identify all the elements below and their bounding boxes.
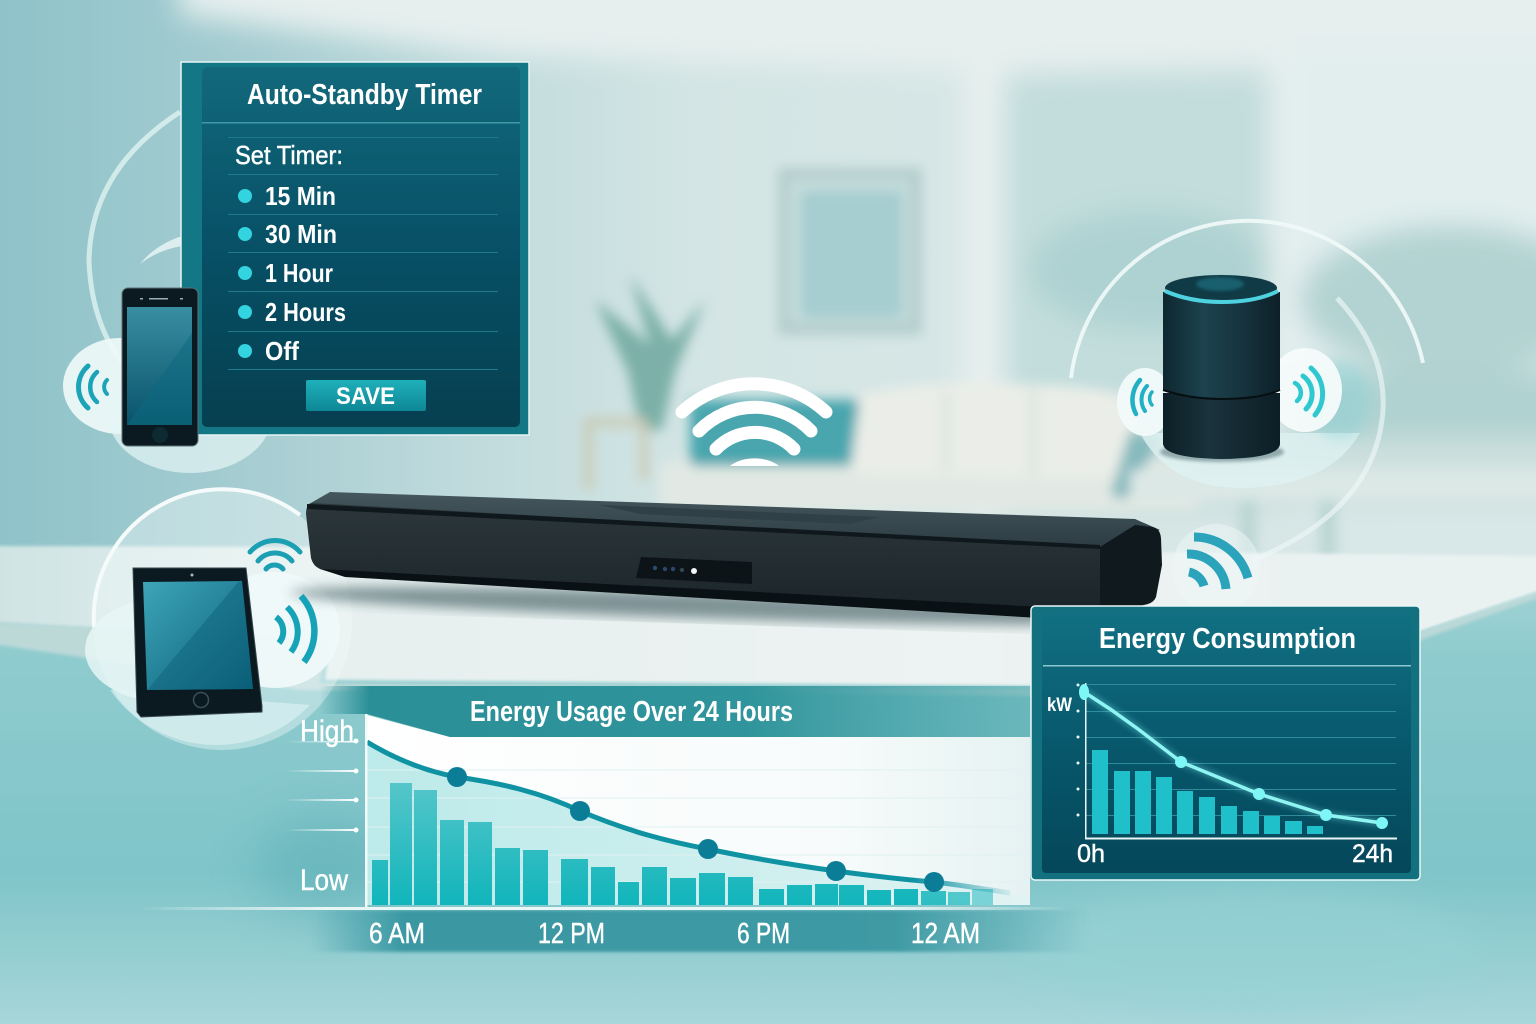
- panel: energy usage over 24 hours chart: [140, 686, 1090, 952]
- axes: [1076, 683, 1397, 840]
- timer option rows: Set Timer:: [235, 140, 343, 170]
- axis lines: [140, 714, 1070, 910]
- icon: speaker signal waves: [1132, 368, 1323, 415]
- save button: SAVE: [336, 383, 395, 410]
- panel: energy consumption: [1031, 606, 1420, 880]
- teal lower backdrop: [0, 590, 1536, 1024]
- timer option rows: 1 Hour: [265, 258, 333, 288]
- chart plot background: [367, 715, 1030, 905]
- soundbar display: [636, 557, 752, 584]
- x-axis labels: 6 AM: [369, 918, 425, 950]
- heading: energy consumption: Energy Consumption: [1099, 623, 1356, 655]
- icon: corner wifi signal: [1172, 524, 1260, 612]
- heading: auto-standby timer: Auto-Standby Timer: [247, 79, 482, 111]
- tablet connection bubble: [85, 489, 352, 750]
- y-axis labels: [300, 715, 354, 897]
- timer option rows: 2 Hours: [265, 297, 346, 327]
- chart title: Energy Usage Over 24 Hours: [470, 696, 793, 728]
- consumption trend line: [1079, 684, 1388, 829]
- smart speaker connection bubble: [1071, 221, 1423, 560]
- save button: [306, 380, 426, 411]
- axis labels: 0h: [1077, 840, 1105, 868]
- timer option rows: [228, 137, 498, 370]
- icon: phone signal waves: [79, 366, 107, 408]
- usage trend line: [367, 742, 1010, 893]
- white counter surface: [0, 546, 1536, 696]
- timer option rows: 30 Min: [265, 219, 337, 249]
- x-axis label strip: [310, 910, 1090, 952]
- chart header band: [320, 686, 1030, 737]
- x-axis labels: 12 PM: [538, 918, 605, 950]
- x-axis labels: 12 AM: [911, 918, 980, 950]
- icon: main white wifi signal: [682, 384, 826, 466]
- axis labels: kW: [1047, 695, 1072, 716]
- consumption bars: [1092, 750, 1323, 834]
- icon: tablet wifi: [250, 541, 300, 569]
- soundbar: [290, 492, 1162, 633]
- icon: tablet: [133, 568, 262, 717]
- icon: tablet signal waves: [276, 596, 314, 662]
- tablet device and signals: [133, 541, 314, 717]
- icon: smartphone: [122, 288, 198, 446]
- phone connection bubble: [63, 112, 272, 473]
- x-axis labels: 6 PM: [737, 918, 790, 950]
- icon: smart speaker: [1160, 275, 1284, 462]
- timer option rows: 15 Min: [265, 181, 336, 211]
- grid lines: [1085, 684, 1396, 816]
- y-axis labels: Low: [300, 864, 348, 897]
- axis labels: [1047, 695, 1393, 868]
- axis labels: 24h: [1352, 840, 1393, 868]
- x-axis labels: [369, 918, 980, 950]
- bars: [372, 783, 993, 905]
- y-axis ticks: [285, 738, 358, 832]
- timer option rows: Off: [265, 336, 299, 366]
- y-axis labels: High: [300, 715, 354, 748]
- panel: auto-standby timer: [181, 62, 529, 435]
